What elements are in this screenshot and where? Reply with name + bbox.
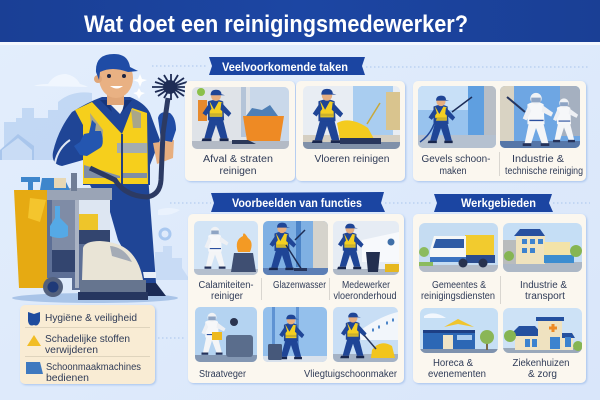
scene: suitcase worker [263,307,327,362]
brush head [152,74,189,100]
label: waste: Afval & straten [203,154,273,165]
supplies on cart [21,177,70,190]
label: industry [505,154,583,177]
job labels: Medewerker [342,280,391,291]
trousers [85,175,156,283]
scene: hospital [503,308,583,353]
safety vest [75,102,148,184]
job labels: Straatveger [199,369,247,380]
panel: key skills [20,305,155,384]
job labels: reiniger [211,291,244,302]
job labels [198,280,398,380]
work area labels: transport [525,291,565,302]
work area labels: Horeca & [433,358,473,369]
panel: work areas [413,214,586,383]
job labels: vloeronderhoud [334,291,396,302]
work area labels: Industrie & [520,280,567,291]
jacket and arms [53,97,160,185]
panel: task cards [185,81,586,181]
icon: cleaning machine [26,362,43,374]
panel: jobs [188,214,404,383]
label: facades: maken [440,166,466,177]
spray bottle [50,206,68,238]
cart [47,190,110,290]
scene: industrial [500,86,580,148]
scene: floor maintenance [333,221,399,275]
job labels: Calamiteiten- [198,280,254,291]
text: remove: verwijderen [45,344,98,356]
work area labels: reinigingsdiensten [421,291,495,302]
work area labels: & zorg [528,369,557,380]
job labels: Vliegtuigschoonmaker [304,369,398,380]
brush pole and hose [90,98,168,197]
scene: window cleaner [263,221,328,275]
label: waste [203,154,273,177]
text: harmful substances: Schadelijke stoffen [45,333,130,345]
title: Wat doet een reinigingsmedewerker? [84,11,468,38]
illustration: cleaner with cart and machine [12,54,189,303]
section: work areas [413,194,586,383]
scene: municipal truck [419,223,498,272]
heading ribbon: Voorbeelden van functies [232,196,362,210]
work area labels: Ziekenhuizen [512,358,570,369]
header band [0,0,600,45]
scene: aircraft cleaner [333,307,398,362]
scene: emergency cleaner [194,221,258,275]
text: hygiene: Hygiëne & veiligheid [45,312,137,324]
heading ribbon: Veelvoorkomende taken [222,60,348,74]
label: facades [422,154,490,177]
work area labels: Gemeentes & [432,280,486,291]
section: common tasks [185,57,586,181]
thumbs-up glove [74,120,103,156]
background skyline [0,74,190,280]
label: floors: Vloeren reinigen [314,154,390,165]
heading ribbon [209,57,365,75]
work area labels: evenementen [428,369,486,380]
scene: facade [418,86,496,148]
scene: hospitality [420,308,498,353]
heading ribbon [434,194,553,212]
floor machine [82,241,143,280]
heading ribbon [211,192,385,212]
scene: floors [303,86,400,149]
label: facades: Gevels schoon- [422,154,490,165]
work area labels [421,280,570,380]
head and cap [94,54,138,105]
icon: warning triangle [27,335,41,346]
ground shadow [12,293,178,303]
yellow bag [14,190,52,288]
text: machines: Schoonmaakmachines [46,361,141,373]
scene: industry building [503,223,582,272]
label: industry: technische reiniging [505,166,583,177]
text: operate: bedienen [46,372,89,384]
section: example jobs [188,192,404,383]
job labels: Glazenwasser [273,280,327,291]
dotted connector lines [152,66,590,338]
label: waste: reinigen [220,166,256,177]
scene: waste [192,87,289,149]
forearm and glove [153,140,174,164]
heading ribbon: Werkgebieden [461,196,536,210]
icon: shield [28,312,40,326]
wheel [43,277,63,297]
sleeve stripe [55,140,70,163]
scene: street sweeper [195,307,257,362]
label: industry: Industrie & [512,154,564,165]
